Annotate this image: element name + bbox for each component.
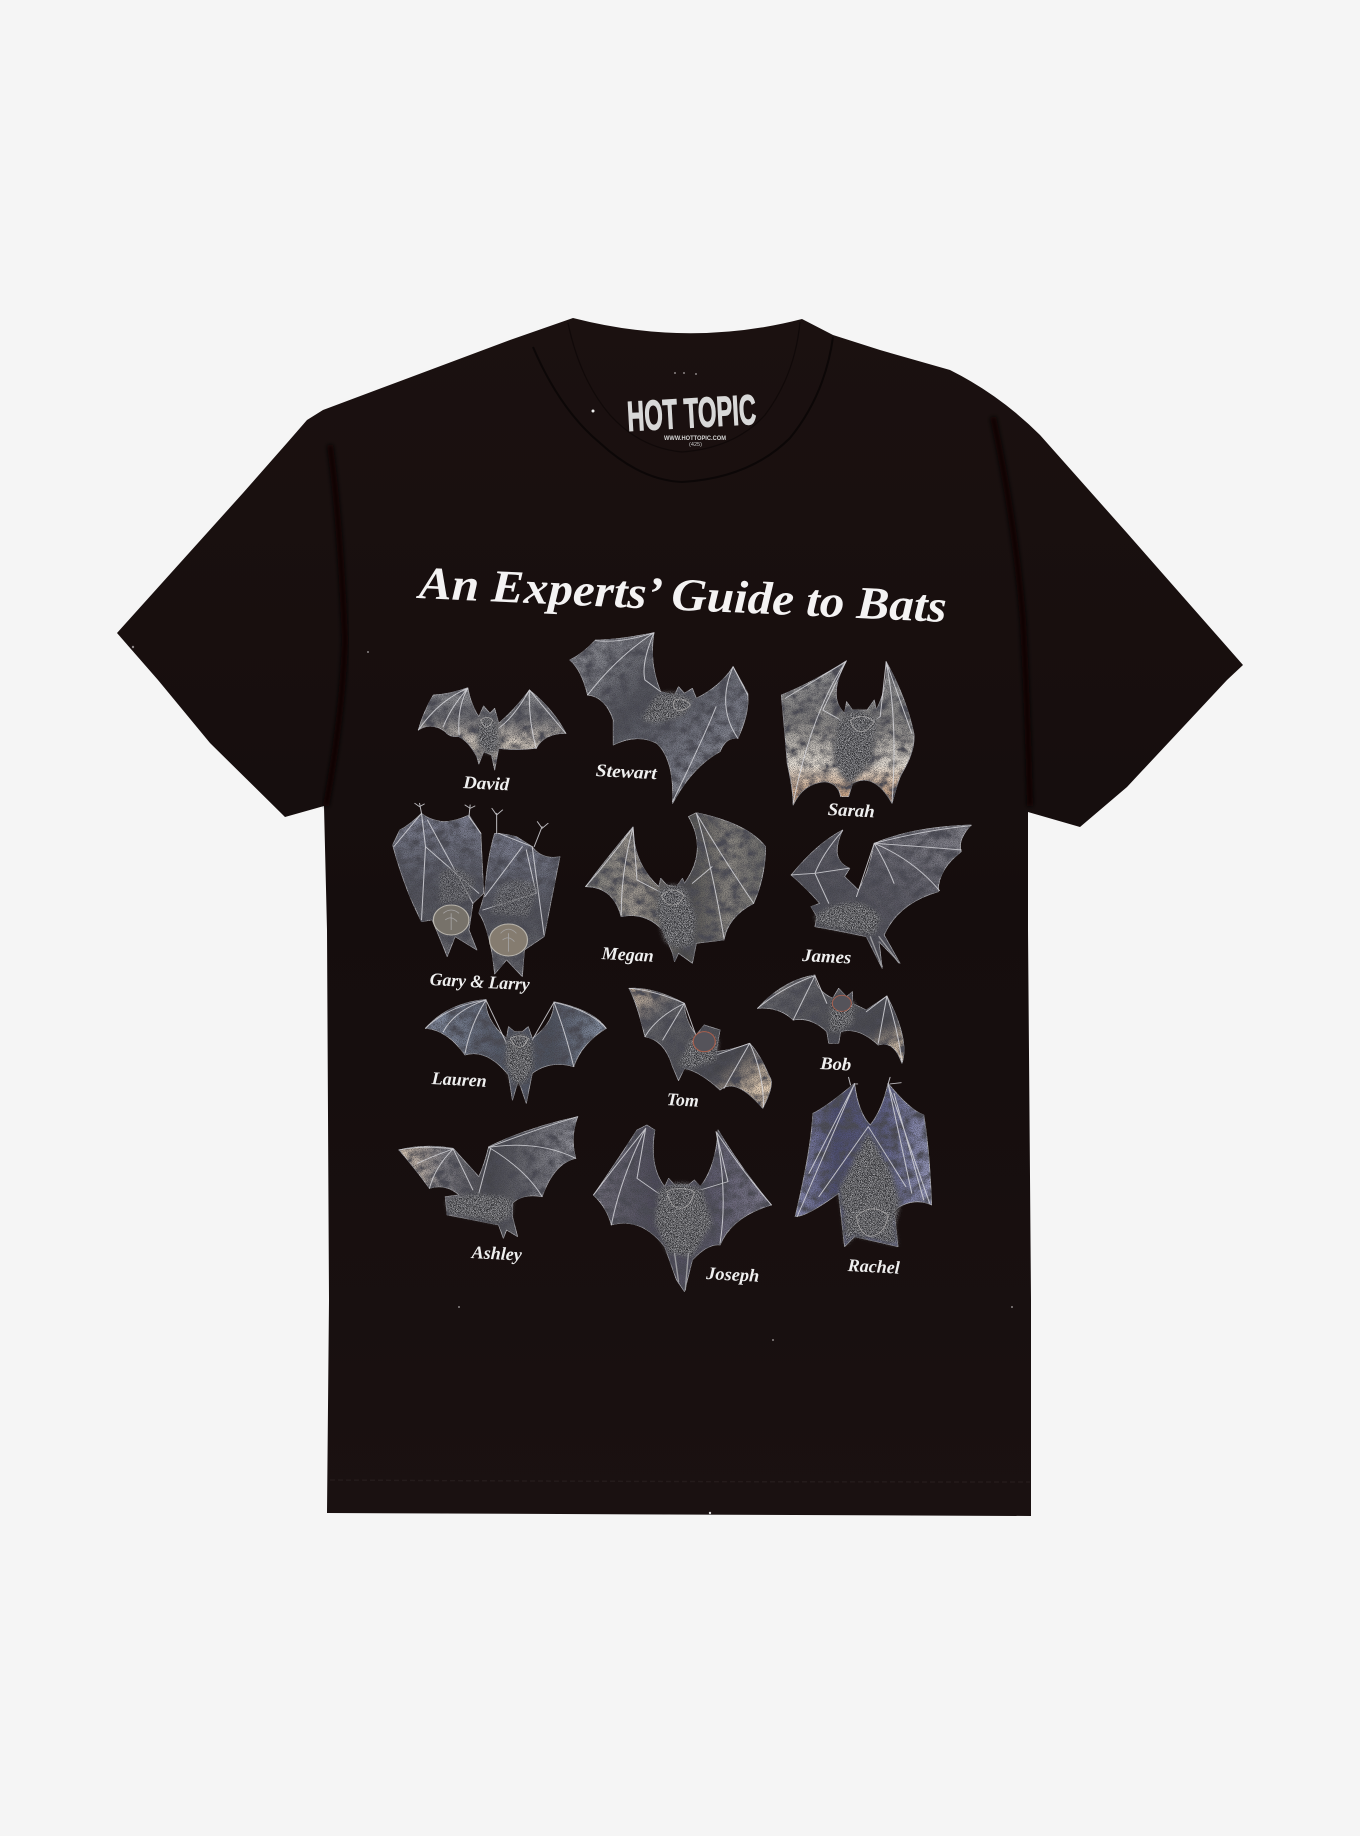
- bats row group 2: [399, 975, 932, 1292]
- collar inner edge: [568, 322, 800, 452]
- name: Gary and Larry: Gary & Larry: [429, 969, 531, 994]
- bat: Ashley: [399, 1117, 578, 1238]
- title: An Experts’ Guide to Bats: [415, 557, 948, 632]
- brand url: WWW.HOTTOPIC.COM: [664, 435, 726, 442]
- name: Megan: Megan: [600, 943, 654, 966]
- right sleeve seam: [993, 417, 1030, 806]
- bat: Joseph: [594, 1125, 771, 1292]
- shirt silhouette: [117, 318, 1243, 1516]
- name: Tom: Tom: [666, 1089, 699, 1111]
- bat: Stewart: [570, 633, 748, 803]
- name: David: David: [462, 772, 511, 794]
- fabric specks: [132, 372, 1013, 1514]
- collar seam: [533, 337, 833, 482]
- name: Joseph: Joseph: [705, 1263, 760, 1286]
- name: Stewart: Stewart: [595, 760, 658, 783]
- bat: Lauren: [425, 999, 606, 1103]
- bat names: [429, 760, 900, 1286]
- name: James: James: [801, 945, 852, 968]
- bat: Rachel: [795, 1077, 932, 1247]
- t-shirt: [117, 318, 1243, 1516]
- bat: James: [791, 825, 971, 968]
- bat: Tom: [629, 988, 771, 1108]
- name: Ashley: Ashley: [470, 1242, 523, 1265]
- bat: David: [418, 688, 566, 770]
- name: Rachel: Rachel: [846, 1255, 900, 1278]
- name: Sarah: Sarah: [827, 799, 875, 821]
- left sleeve seam: [326, 445, 345, 806]
- bats: Gary and Larry: [393, 803, 560, 977]
- size code: (425): [689, 442, 702, 448]
- name: Lauren: Lauren: [430, 1068, 487, 1091]
- name: Bob: Bob: [819, 1053, 852, 1075]
- bat: Bob: [758, 975, 904, 1063]
- hem stitching: [330, 1480, 1030, 1482]
- bat: Sarah: [781, 661, 914, 805]
- bats row group 1: [393, 633, 971, 977]
- neck label: Hot Topic: [626, 386, 757, 448]
- bat: Megan: [586, 813, 766, 963]
- brand name: HOT TOPIC: [626, 386, 757, 440]
